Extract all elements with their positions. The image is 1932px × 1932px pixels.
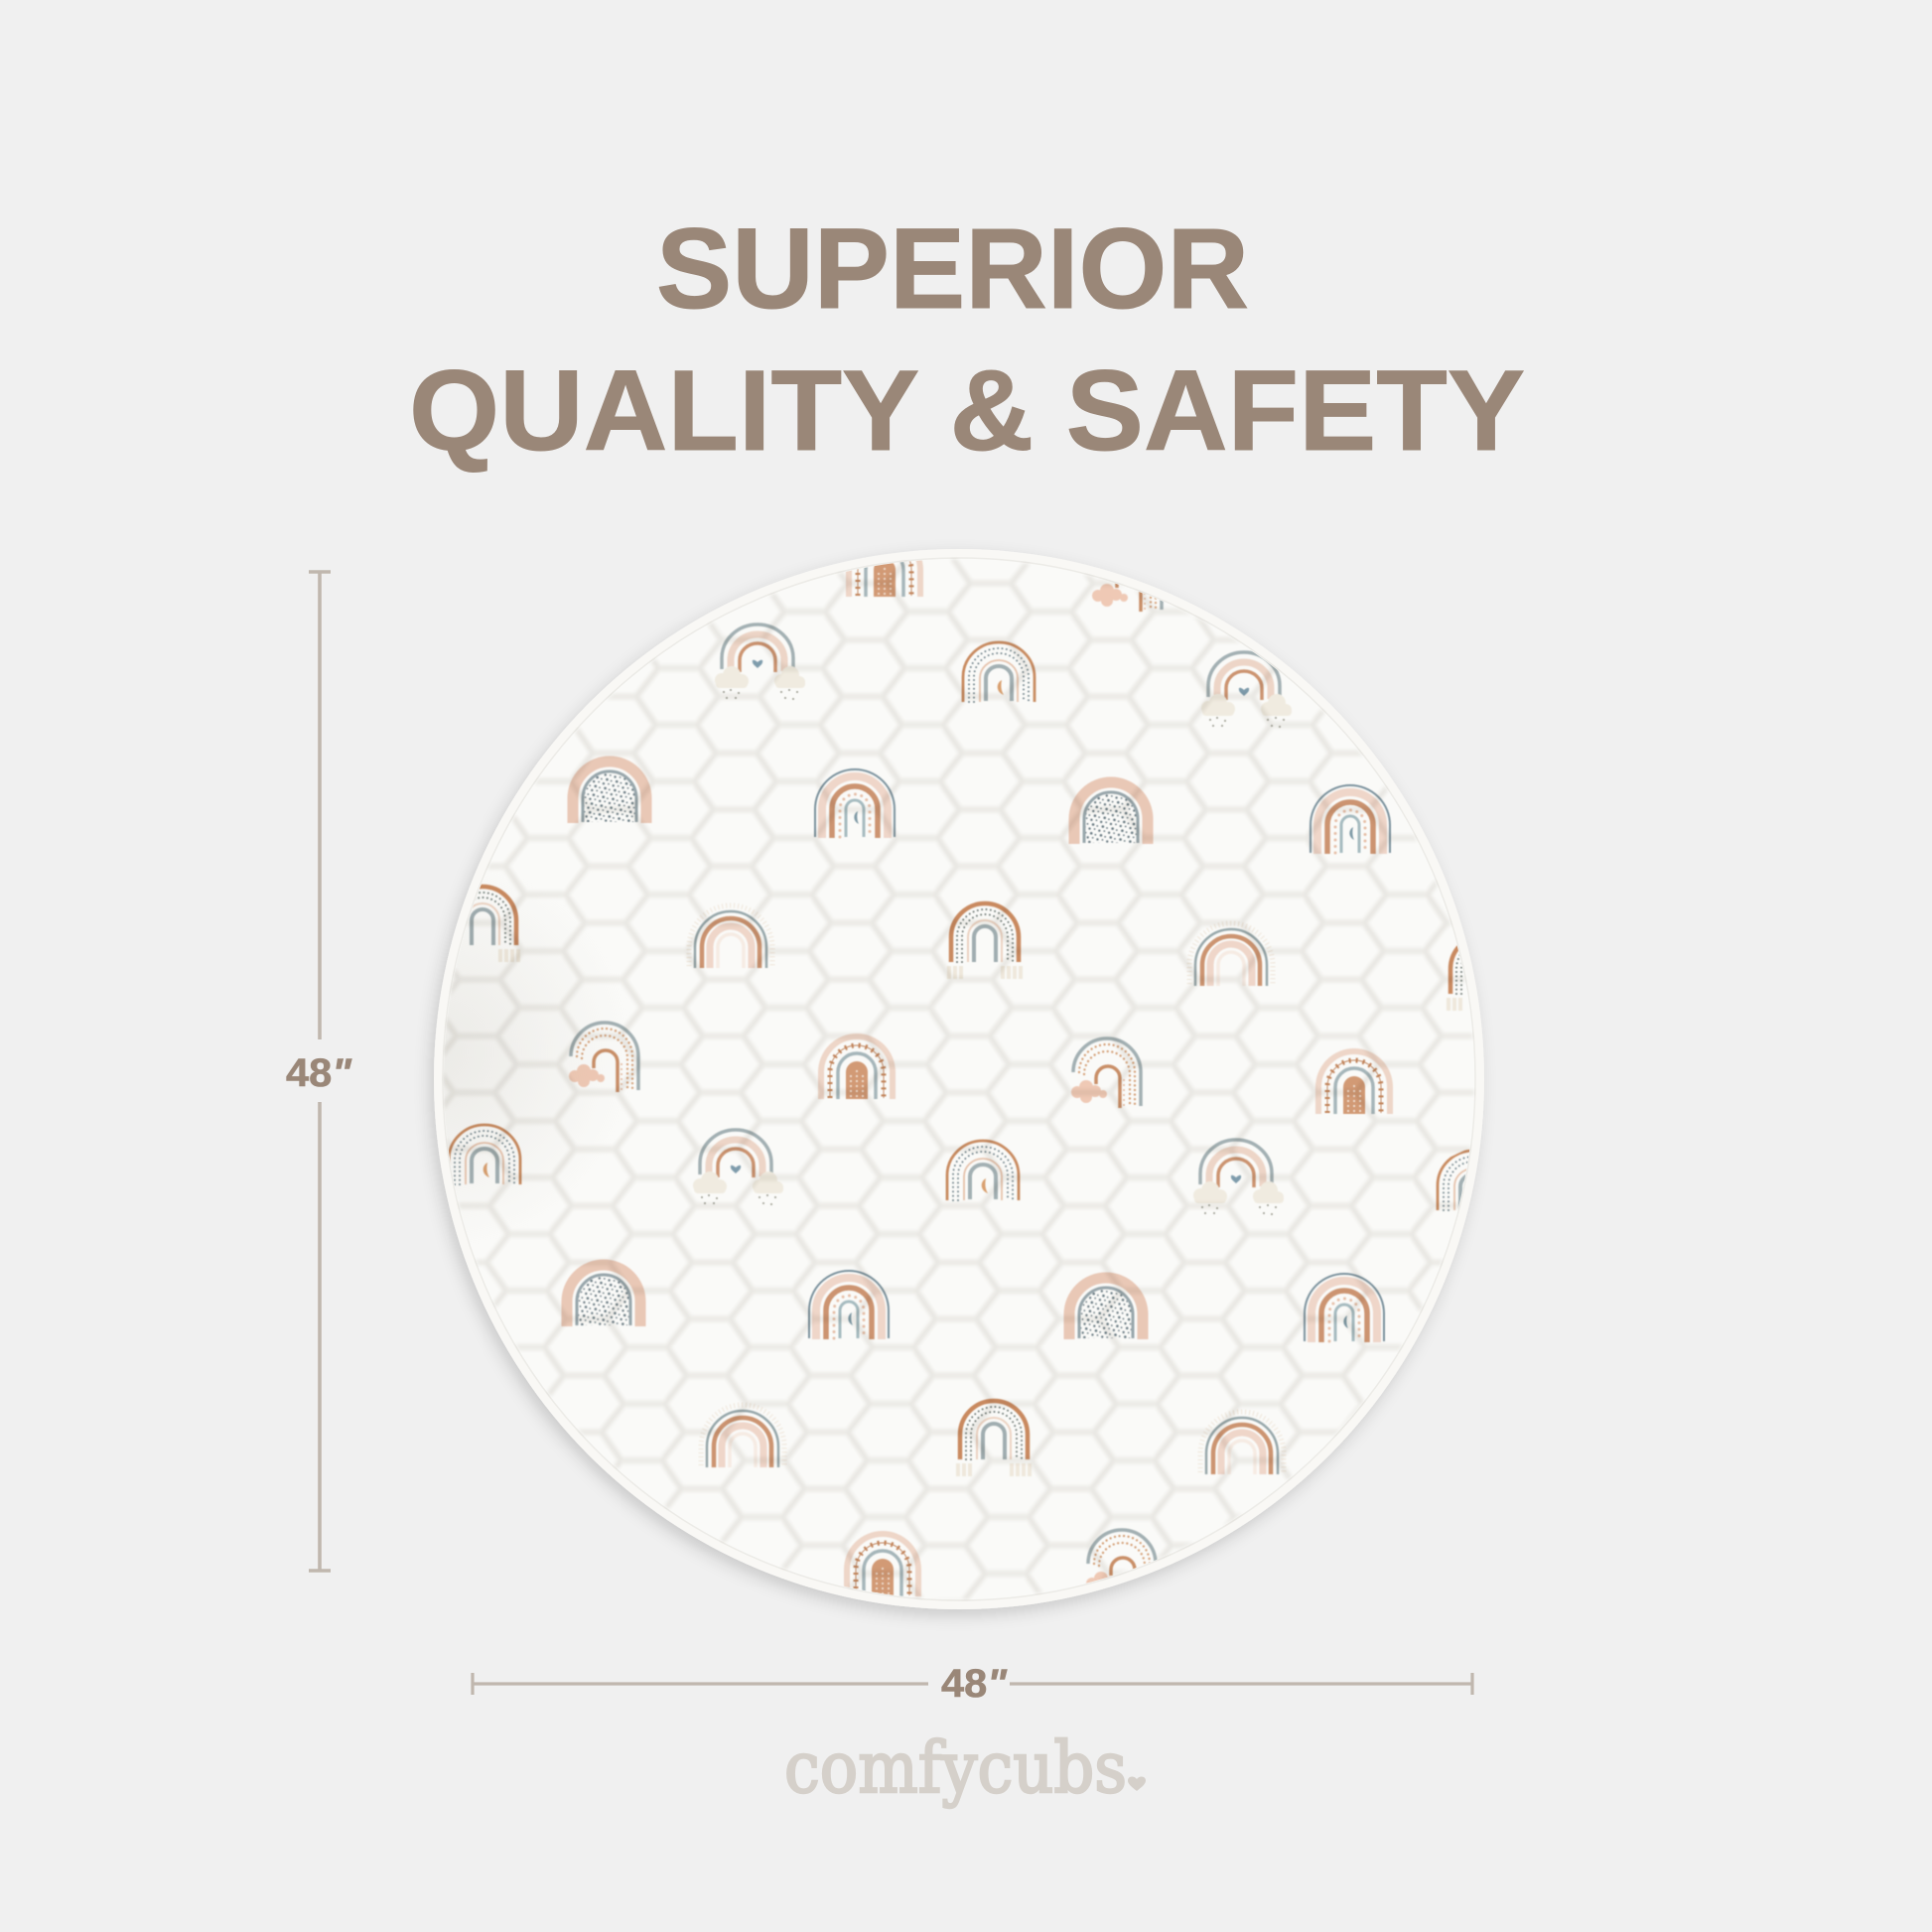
rainbow striped bbox=[701, 1405, 784, 1467]
icon: logo heart bbox=[1128, 1776, 1146, 1791]
rainbow heart and clouds bbox=[715, 624, 805, 700]
rainbow tassel bbox=[949, 903, 1021, 979]
rainbow flower bbox=[1086, 1530, 1156, 1599]
mat quilted surface bbox=[443, 558, 1475, 1600]
vertical dimension: 48 inches bbox=[286, 572, 352, 1571]
rainbow wreath bbox=[821, 1036, 893, 1099]
rainbow right cut-off tassel bbox=[1446, 945, 1463, 1011]
rainbow wreath bbox=[847, 1534, 918, 1596]
rainbow dotted moon bbox=[963, 642, 1035, 702]
mat rainbow print bbox=[447, 534, 1520, 1599]
logo: comfycubs: comfycubs bbox=[784, 1726, 1127, 1809]
rainbow left cut-off tassel bbox=[469, 884, 520, 963]
rainbow heart and clouds bbox=[1201, 652, 1292, 728]
label: horizontal 48 inches: 48" bbox=[941, 1662, 1008, 1706]
rainbow top cut-off wreath bbox=[846, 560, 923, 598]
rainbow striped bbox=[689, 905, 772, 968]
rainbow blue outline moon bbox=[809, 1271, 889, 1339]
honeycomb quilting seams bbox=[444, 559, 1474, 1599]
rainbow blue outline moon bbox=[815, 769, 895, 838]
rainbow pink speckled bbox=[573, 761, 646, 823]
rainbow top cut-off flower bbox=[1092, 584, 1164, 613]
title bbox=[409, 206, 1525, 475]
rainbow right cut-off dotted moon bbox=[1436, 1149, 1469, 1211]
rainbow blue outline moon bbox=[1311, 785, 1390, 854]
label: vertical 48 inches: 48" bbox=[286, 1051, 352, 1095]
rainbow heart and clouds bbox=[1193, 1140, 1284, 1215]
rainbow heart and clouds bbox=[693, 1130, 783, 1205]
rainbow pink speckled bbox=[1074, 782, 1148, 844]
mat piping edge bbox=[434, 549, 1484, 1609]
rainbow blue outline moon bbox=[1305, 1274, 1384, 1342]
horizontal dimension: 48 inches bbox=[473, 1662, 1472, 1706]
title: QUALITY & SAFETY bbox=[409, 347, 1525, 475]
rainbow striped bbox=[1200, 1412, 1284, 1474]
rainbow flower bbox=[569, 1023, 638, 1092]
left edge shading bbox=[444, 559, 1474, 1599]
rainbow dotted moon bbox=[449, 1125, 520, 1184]
rainbow dotted moon bbox=[947, 1141, 1019, 1200]
rainbow flower bbox=[1071, 1038, 1141, 1108]
rainbow tassel bbox=[958, 1401, 1030, 1476]
rainbow wreath bbox=[1318, 1051, 1390, 1114]
rainbow pink speckled bbox=[1069, 1278, 1143, 1339]
title: SUPERIOR bbox=[656, 206, 1249, 333]
rainbow striped bbox=[1189, 923, 1273, 986]
rainbow pink speckled bbox=[567, 1265, 640, 1326]
quilted round play mat bbox=[434, 534, 1520, 1609]
